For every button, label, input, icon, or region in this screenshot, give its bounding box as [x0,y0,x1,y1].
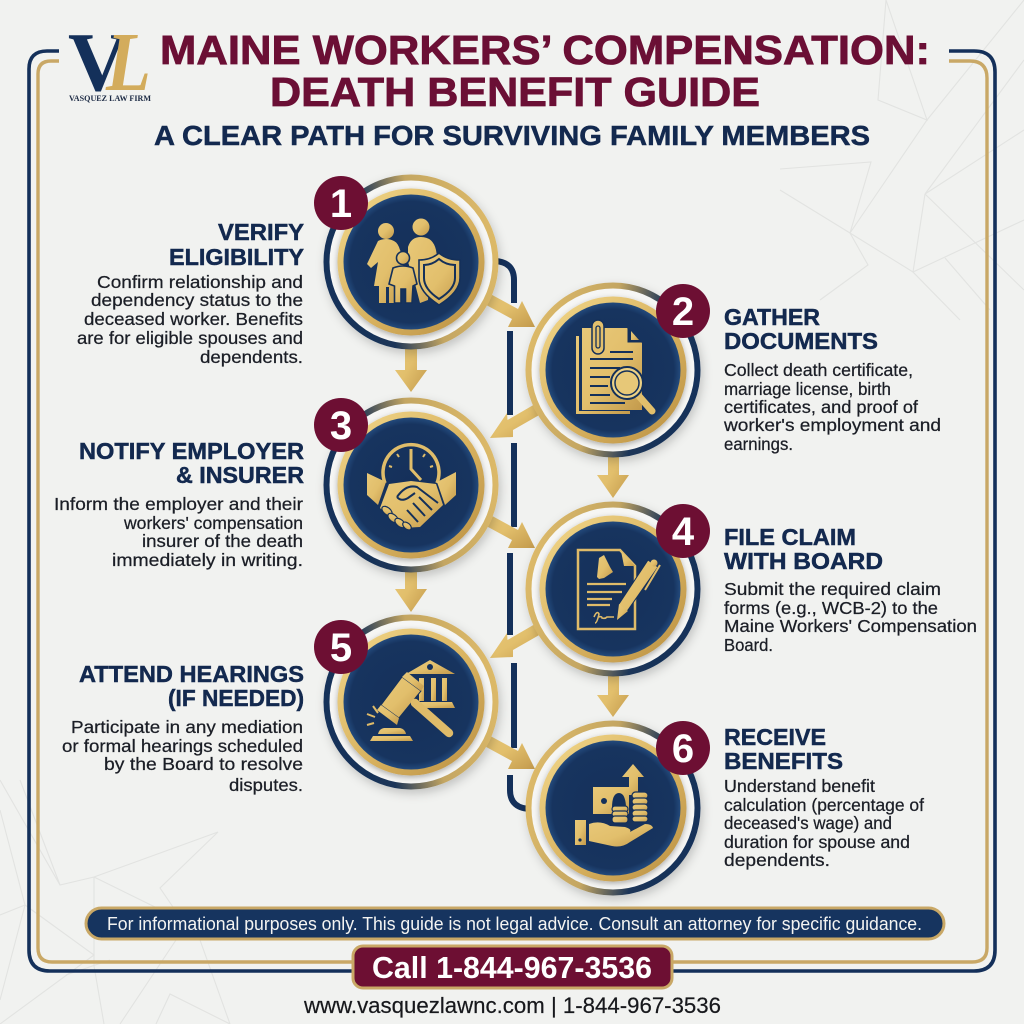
arrow: 2 to 3 [490,400,548,438]
step 4 text: forms (e.g., WCB-2) to the [724,598,938,618]
step 1 text: dependents. [200,347,303,367]
icon: family with shield [367,218,460,305]
badge 2: 2 [672,290,694,334]
step 4 text: FILE CLAIM [724,524,856,550]
badge 3: 3 [330,404,352,448]
step 3 text: Inform the employer and their [54,494,303,514]
step 5 text: or formal hearings scheduled [62,736,303,756]
arrow: 3 to 4 [477,511,535,548]
subtitle: A CLEAR PATH FOR SURVIVING FAMILY MEMBERS [154,120,870,151]
step 6 text: duration for spouse and [724,832,910,852]
disclaimer bar [86,908,944,939]
step 1 text: VERIFY [218,219,304,245]
step 4 text: Submit the required claim [724,579,941,599]
step 2 text [723,304,941,454]
step 6 text: deceased's wage) and [724,813,892,833]
connector line: navy path [495,261,532,809]
step 6 text: calculation (percentage of [724,795,924,815]
badge 5: 5 [330,626,352,670]
arrow: 2 to 4 [597,445,629,498]
icon: claim form and pen [578,550,660,629]
step 3 text: NOTIFY EMPLOYER [79,438,304,464]
step 6 text: BENEFITS [724,748,843,774]
step 5 text: (IF NEEDED) [168,685,304,711]
arrow: 3 to 5 [395,558,427,612]
step 3 text: insurer of the death [142,531,303,551]
step 6 text [724,724,924,870]
step 2 text: GATHER [724,304,820,330]
badge 5 [314,620,368,674]
icon: gavel and courthouse [367,660,455,741]
arrow: 1 to 3 [395,335,427,392]
step 1 text: are for eligible spouses and [77,328,303,348]
step 6 text: RECEIVE [724,724,826,750]
icon: clock and handshake [367,445,456,532]
step 1 text: ELIGIBILITY [169,244,304,270]
step 3 text: workers' compensation [123,513,303,533]
step 3 text [54,438,304,570]
step 3 circle [326,400,496,570]
step 5 text: Participate in any mediation [71,717,303,737]
step 1 text: Confirm relationship and [97,272,303,292]
arrow: 4 to 5 [490,620,548,658]
badge 1: 1 [330,182,352,226]
step 2 text: DOCUMENTS [724,328,878,354]
step 3 text: immediately in writing. [112,550,303,570]
step 6 text: Understand benefit [724,776,875,796]
step 4 text: Board. [724,635,773,655]
step 2 text: marriage license, birth [724,379,891,399]
step 2 text: worker's employment and [723,415,941,435]
step 5 text: disputes. [229,775,303,795]
title [160,27,930,115]
step 5 circle [326,618,496,786]
logo: L [105,16,151,109]
step 6 text: dependents. [724,850,830,870]
arrow: 5 to 6 [477,732,535,769]
step 5 text: ATTEND HEARINGS [79,661,304,687]
step 2 text: earnings. [724,434,793,454]
step 4 circle [528,504,698,674]
arrow: 1 to 2 [477,290,535,327]
step 4 text: WITH BOARD [724,548,883,574]
badge 1 [314,176,368,230]
badge 3 [314,398,368,452]
title: DEATH BENEFIT GUIDE [270,69,760,115]
badge 6: 6 [672,727,694,771]
step 4 text [724,524,977,655]
badge 6 [656,721,710,775]
step 2 circle [528,286,698,454]
step 3 text: & INSURER [176,462,304,488]
step 1 circle [326,178,496,346]
logo: V [68,16,128,109]
call button: Call 1-844-967-3536 [372,950,652,985]
title: MAINE WORKERS’ COMPENSATION: [160,27,930,73]
badge 2 [656,284,710,338]
step 2 text: Collect death certificate, [724,360,913,380]
logo: VASQUEZ LAW FIRM [69,94,151,103]
badge 4 [656,504,710,558]
step 1 text: dependency status to the [91,290,303,310]
step 1 text: deceased worker. Benefits [84,309,303,329]
step 4 text: Maine Workers' Compensation [724,616,977,636]
step 5 text: by the Board to resolve [104,754,303,774]
step 6 circle [528,724,698,892]
step 1 text [77,219,304,367]
disclaimer bar: For informational purposes only. This guide is not legal advice. Consult an attorney for specific guidance. [107,914,922,934]
step 5 text [62,661,304,795]
icon: money in hand [575,764,653,846]
icon: documents and magnifier [576,320,652,414]
arrow: 4 to 6 [597,664,629,717]
step 2 text: certificates, and proof of [724,397,918,417]
footer contact: www.vasquezlawnc.com | 1-844-967-3536 [303,993,721,1018]
badge 4: 4 [672,510,695,554]
